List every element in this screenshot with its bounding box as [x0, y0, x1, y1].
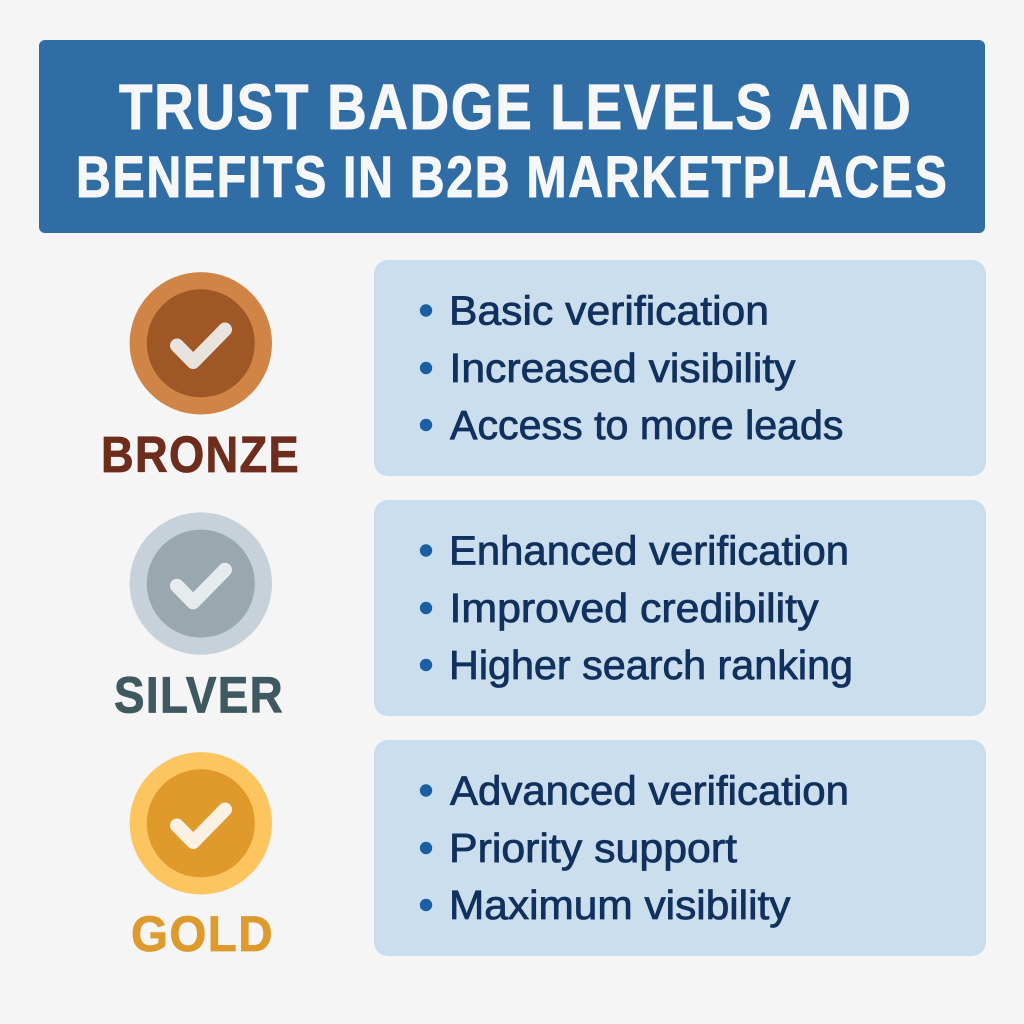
- bullet: [420, 842, 432, 854]
- silver label: SILVER: [114, 666, 284, 724]
- bullet: [420, 784, 432, 797]
- gold label: GOLD: [131, 906, 274, 962]
- benefit text: Enhanced verification: [449, 528, 849, 574]
- benefit text: Maximum visibility: [449, 882, 791, 928]
- panel: bronze benefits: [374, 260, 986, 476]
- benefit text: Increased visibility: [450, 345, 796, 391]
- icon: silver badge: [130, 512, 272, 655]
- benefit text: Improved credibility: [450, 585, 819, 631]
- bullet: [420, 362, 432, 374]
- icon: gold badge: [130, 752, 272, 894]
- bronze label: BRONZE: [101, 426, 300, 483]
- panel: silver benefits: [374, 500, 986, 716]
- benefit text: Basic verification: [449, 288, 769, 334]
- title banner: [39, 40, 985, 233]
- bullet: [420, 419, 432, 431]
- bullet: [420, 899, 432, 911]
- bullet: [420, 304, 432, 317]
- benefit text: Higher search ranking: [449, 642, 853, 688]
- bullet: [420, 602, 432, 614]
- title line 1: TRUST BADGE LEVELS AND: [119, 71, 912, 143]
- bullet: [420, 659, 432, 671]
- benefit text: Priority support: [449, 825, 738, 871]
- benefit text: Advanced verification: [450, 768, 849, 814]
- icon: bronze badge: [130, 272, 272, 414]
- panel: gold benefits: [374, 740, 986, 956]
- bullet: [420, 544, 432, 557]
- benefit text: Access to more leads: [450, 402, 844, 448]
